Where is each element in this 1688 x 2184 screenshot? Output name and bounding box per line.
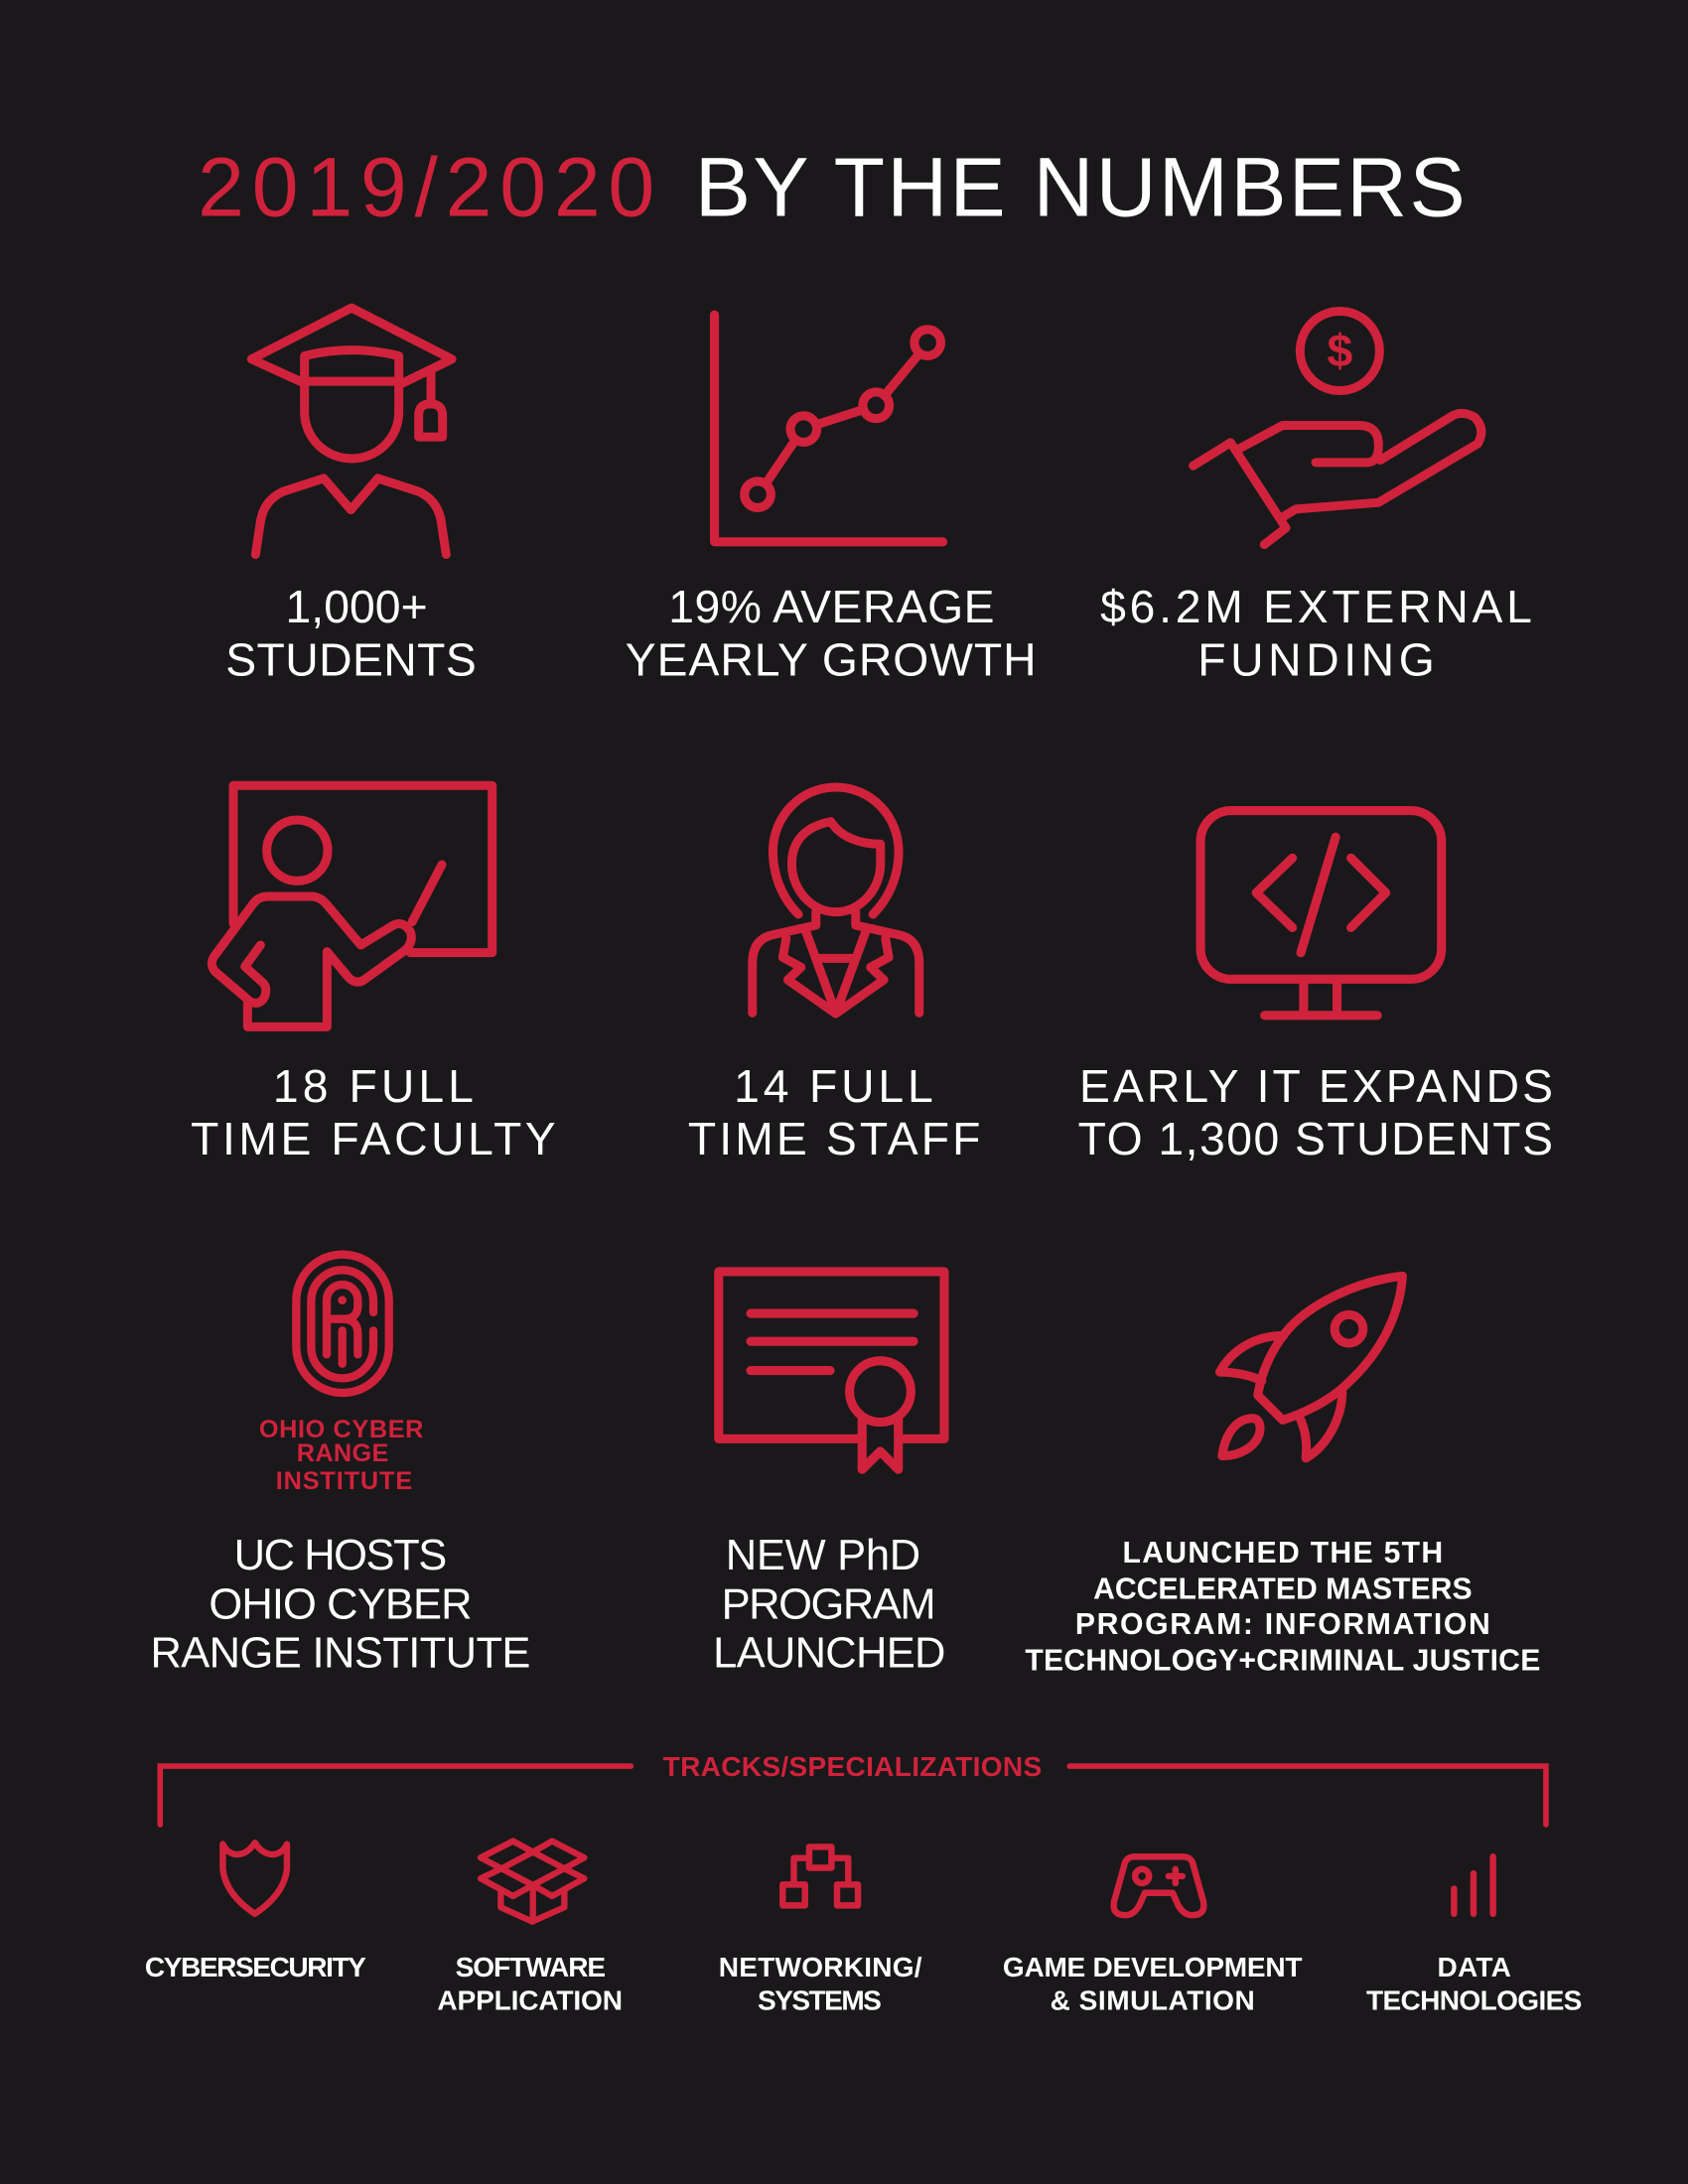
label: staff: 14 FULL	[734, 1060, 933, 1112]
label: data technologies: DATA	[1438, 1952, 1511, 1982]
label: accelerated masters: LAUNCHED THE 5TH	[1123, 1537, 1443, 1570]
label: growth: 19% AVERAGE	[668, 581, 994, 632]
label: growth: YEARLY GROWTH	[626, 633, 1037, 685]
label: software application: APPLICATION	[437, 1985, 623, 2016]
label: game development: & SIMULATION	[1051, 1985, 1255, 2016]
panel: early IT	[1078, 811, 1553, 1164]
label: early IT	[1078, 1060, 1553, 1164]
label: Ohio Cyber Range Institute	[150, 1532, 530, 1677]
icon: line chart	[715, 315, 943, 542]
icon: rocket	[1219, 1276, 1402, 1458]
panel: students	[225, 308, 477, 685]
heading: tracks: TRACKS/SPECIALIZATIONS	[663, 1751, 1042, 1782]
label: networking	[719, 1952, 922, 2016]
icon: Ohio Cyber Range logo: RANGE	[297, 1439, 388, 1467]
label: funding	[1100, 581, 1532, 685]
label: accelerated masters: TECHNOLOGY+CRIMINAL JUSTICE	[1025, 1644, 1540, 1677]
panel: Ohio Cyber Range Institute	[150, 1255, 530, 1677]
icon: open box	[481, 1842, 584, 1922]
panel: tracks	[145, 1751, 1582, 2016]
title	[198, 140, 1466, 233]
panel: PhD	[713, 1272, 945, 1677]
label: accelerated masters: ACCELERATED MASTERS	[1093, 1573, 1473, 1606]
icon: hand with coin: $	[1327, 325, 1352, 376]
label: PhD: LAUNCHED	[713, 1629, 945, 1677]
icon: code monitor	[1200, 811, 1442, 1016]
label: early IT: TO 1,300 STUDENTS	[1078, 1113, 1553, 1164]
label: accelerated masters	[1025, 1537, 1540, 1677]
icon: Ohio Cyber Range logo: OHIO CYBER	[259, 1416, 423, 1443]
label: students: 1,000+	[286, 581, 428, 632]
label: students: STUDENTS	[225, 633, 477, 685]
label: funding: $6.2M EXTERNAL	[1100, 581, 1532, 632]
icon: network	[782, 1846, 858, 1905]
label: cybersecurity: CYBERSECURITY	[145, 1952, 366, 1982]
label: Ohio Cyber Range Institute: OHIO CYBER	[209, 1580, 472, 1628]
label: faculty	[191, 1060, 556, 1164]
icon: shield	[222, 1843, 287, 1914]
label: staff	[688, 1060, 980, 1164]
panel: funding	[1100, 311, 1532, 685]
label: software application: SOFTWARE	[456, 1952, 606, 1982]
icon: Ohio Cyber Range logo: INSTITUTE	[276, 1467, 412, 1495]
label: data technologies: TECHNOLOGIES	[1366, 1985, 1582, 2016]
label: game development	[1003, 1952, 1302, 2016]
label: early IT: EARLY IT EXPANDS	[1079, 1060, 1553, 1112]
icon: gamepad	[1114, 1856, 1203, 1915]
icon: woman in blazer	[753, 787, 919, 1014]
label: game development: GAME DEVELOPMENT	[1003, 1952, 1302, 1982]
label: faculty: TIME FACULTY	[191, 1113, 556, 1164]
title: 2019/2020	[198, 140, 654, 233]
label: networking: NETWORKING/	[719, 1952, 922, 1982]
panel: staff	[688, 787, 980, 1164]
label: funding: FUNDING	[1197, 633, 1435, 685]
label: faculty: 18 FULL	[273, 1060, 474, 1112]
label: PhD: PROGRAM	[722, 1580, 936, 1628]
icon: teacher at board	[211, 785, 492, 1026]
label: networking: SYSTEMS	[758, 1985, 882, 2016]
label: accelerated masters: PROGRAM: INFORMATION	[1075, 1608, 1490, 1641]
icon: bars	[1454, 1856, 1493, 1914]
label: PhD	[713, 1532, 945, 1677]
icon: hand with coin	[1194, 311, 1481, 545]
label: data technologies	[1366, 1952, 1582, 2016]
label: students	[225, 581, 477, 685]
label: staff: TIME STAFF	[688, 1113, 980, 1164]
bracket: tracks	[160, 1766, 1546, 1825]
label: PhD: NEW PhD	[726, 1532, 920, 1579]
label: Ohio Cyber Range Institute: RANGE INSTITUTE	[150, 1629, 530, 1677]
icon: diploma	[719, 1272, 944, 1469]
label: growth	[626, 581, 1037, 685]
icon: graduate	[251, 308, 452, 555]
title: BY THE NUMBERS	[695, 140, 1466, 233]
label: Ohio Cyber Range Institute: UC HOSTS	[234, 1532, 447, 1579]
panel: faculty	[191, 785, 556, 1164]
label: software application	[437, 1952, 623, 2016]
icon: Ohio Cyber Range logo	[259, 1255, 423, 1495]
panel: accelerated masters	[1025, 1276, 1540, 1677]
panel: growth	[626, 315, 1037, 685]
